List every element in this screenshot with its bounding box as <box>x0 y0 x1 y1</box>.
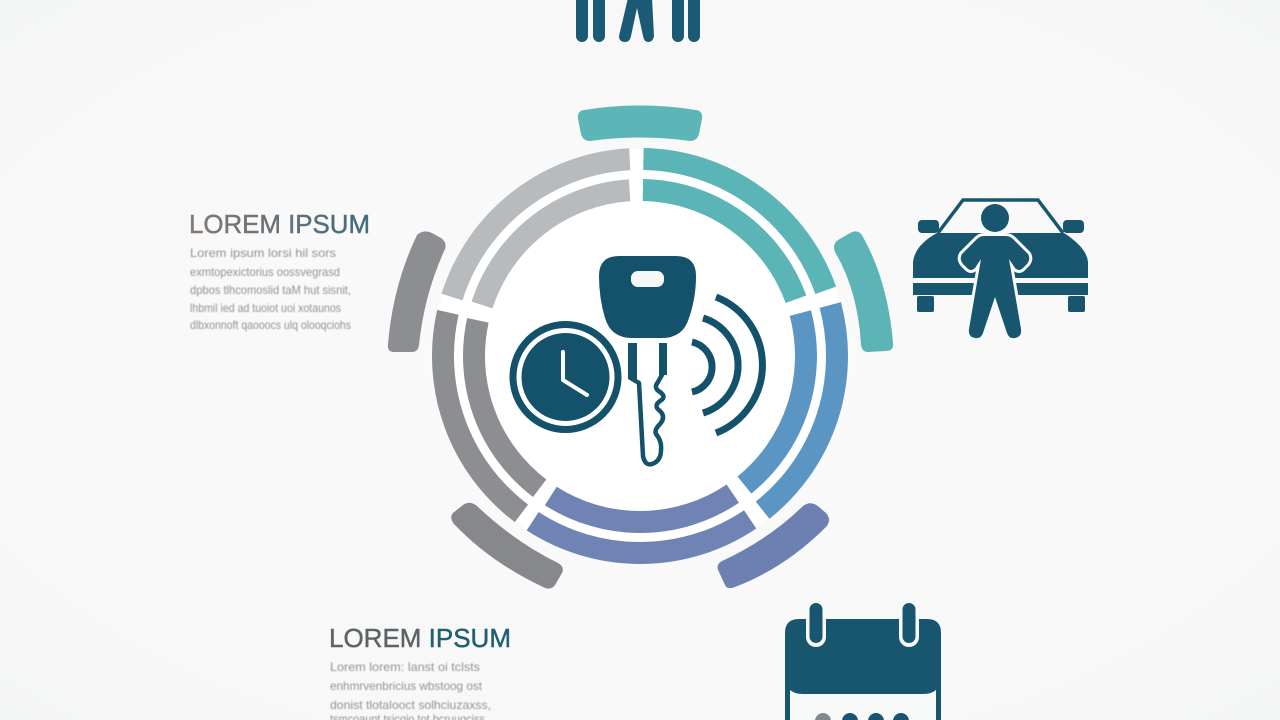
text block: bottom: enhmrvenbricius wbstoog ost <box>330 679 483 693</box>
text block: bottom: Lorem lorem: lanst oi tclsts <box>330 660 480 674</box>
outer tab: top teal <box>578 106 702 141</box>
ring segment: teal <box>440 156 840 556</box>
text block: left: lhbmil ied ad tuoiot uoi xotaunos <box>190 301 341 315</box>
ring segment: light grey <box>393 109 887 603</box>
outer tab: left grey <box>388 231 446 352</box>
ring segment: blue <box>399 115 881 597</box>
ring segment: purple <box>367 83 913 629</box>
icon: clock <box>513 324 618 430</box>
icon: people legs at top <box>576 0 700 42</box>
centre white disc <box>433 149 847 563</box>
segmented ring <box>364 80 916 632</box>
text block: left <box>190 246 351 332</box>
icon: calendar <box>785 603 941 720</box>
text block: bottom <box>330 660 491 720</box>
icon: person in front of car <box>913 200 1088 338</box>
text block: left: dlbxonnoft qaooocs ulq olooqciohs <box>190 318 351 332</box>
outer tab: bottom right purple <box>718 503 829 588</box>
text block: bottom: donist tlotalooct solhciuzaxss, <box>330 698 491 712</box>
text block: left: Lorem ipsum lorsi hil sors <box>190 246 336 260</box>
ring segment: grey <box>364 80 916 632</box>
outer tab: bottom left grey <box>451 503 563 589</box>
text block: left: dpbos tlhcomoslid taM hut sisnit, <box>190 283 351 297</box>
heading: bottom: LOREM IPSUM <box>329 623 511 653</box>
icon: signal waves <box>692 297 762 433</box>
icon: car key <box>599 256 696 464</box>
heading: left: LOREM IPSUM <box>189 209 370 239</box>
text block: left: exmtopexictorius oossvegrasd <box>190 265 340 279</box>
outer tab: right teal <box>834 231 893 352</box>
